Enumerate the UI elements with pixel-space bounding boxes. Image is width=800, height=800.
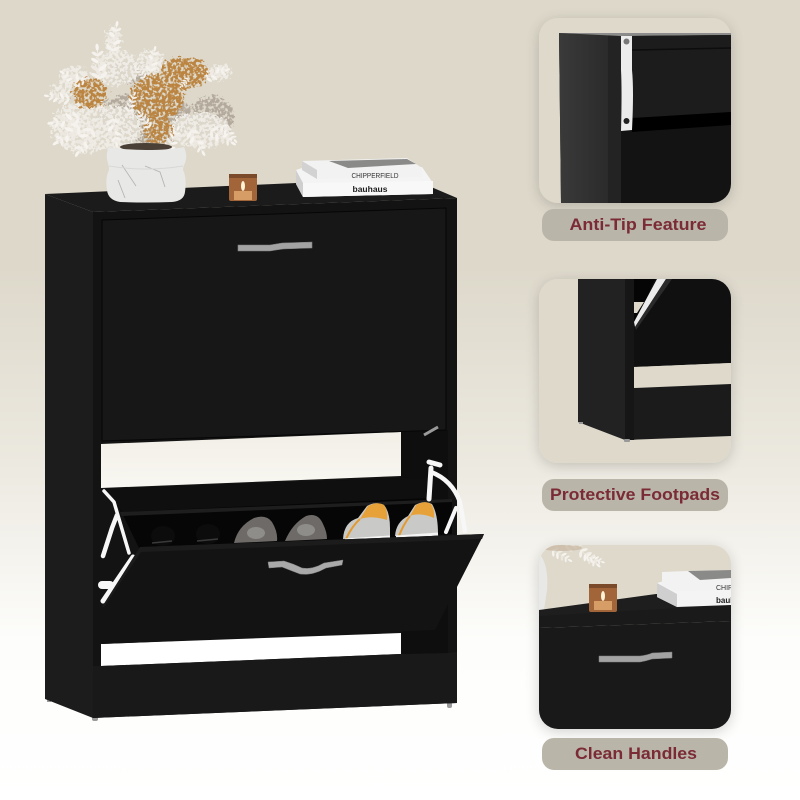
panel 2 card [539, 279, 731, 463]
upper door handle [238, 242, 312, 251]
foliage shadow mass [96, 60, 234, 144]
sprigs [43, 20, 241, 161]
panel 3 image: CHIPPERFIELD [716, 585, 767, 592]
decor: dried flowers [43, 20, 241, 161]
footpads label text: Protective Footpads [550, 485, 720, 504]
dark shoes [151, 524, 220, 546]
footpads label pill [542, 479, 728, 511]
book title: Chipperfield: CHIPPERFIELD [352, 171, 399, 180]
panel: clean handles [533, 542, 737, 770]
footpad [624, 439, 630, 442]
lower book [296, 167, 433, 197]
sneakers [343, 502, 438, 540]
tilted flap [102, 534, 484, 644]
anti-tip strap [621, 36, 633, 131]
anti-tip label pill [542, 209, 728, 241]
panel 3 candle [589, 588, 617, 612]
right white hinge [429, 462, 465, 532]
compartment lip [120, 499, 452, 516]
cabinet base [93, 652, 457, 718]
panel 1 card [539, 18, 731, 203]
left white hinge [102, 491, 133, 601]
panel 1 image [559, 33, 731, 203]
cabinet side panel [45, 194, 93, 718]
panel 3 books [657, 581, 731, 607]
right column inner [401, 430, 448, 654]
handles label text: Clean Handles [575, 744, 697, 763]
orange blooms [73, 57, 208, 144]
white foliage mass [49, 26, 232, 153]
book title: bauhaus: bauhaus [353, 184, 388, 194]
panel: protective footpads [539, 279, 731, 511]
decor: marble vase [106, 143, 186, 202]
compartment back panel [105, 477, 452, 550]
grey shoes [234, 515, 327, 543]
cabinet top surface [45, 178, 457, 212]
decor: candle [229, 174, 257, 201]
upper door [102, 208, 446, 441]
tilted compartment [102, 462, 484, 644]
panel 3 image: bauhaus [716, 596, 749, 605]
cabinet front frame [93, 198, 457, 718]
upper book [302, 158, 422, 179]
panel: anti-tip feature [539, 18, 731, 241]
handles label pill [542, 738, 728, 770]
cabinet feet [47, 698, 452, 721]
lower opening [101, 633, 401, 666]
product: shoe cabinet [45, 178, 484, 721]
panel 3 image [539, 545, 731, 729]
decor: books [296, 158, 433, 197]
hinge stub [424, 427, 438, 435]
panel 3 handle [599, 652, 672, 662]
panel 2 image [578, 279, 731, 442]
foreground sprigs [123, 63, 191, 153]
upper opening [101, 432, 401, 488]
anti-tip label text: Anti-Tip Feature [570, 215, 706, 234]
panel 3 card [539, 545, 731, 729]
flap handle [268, 560, 343, 574]
